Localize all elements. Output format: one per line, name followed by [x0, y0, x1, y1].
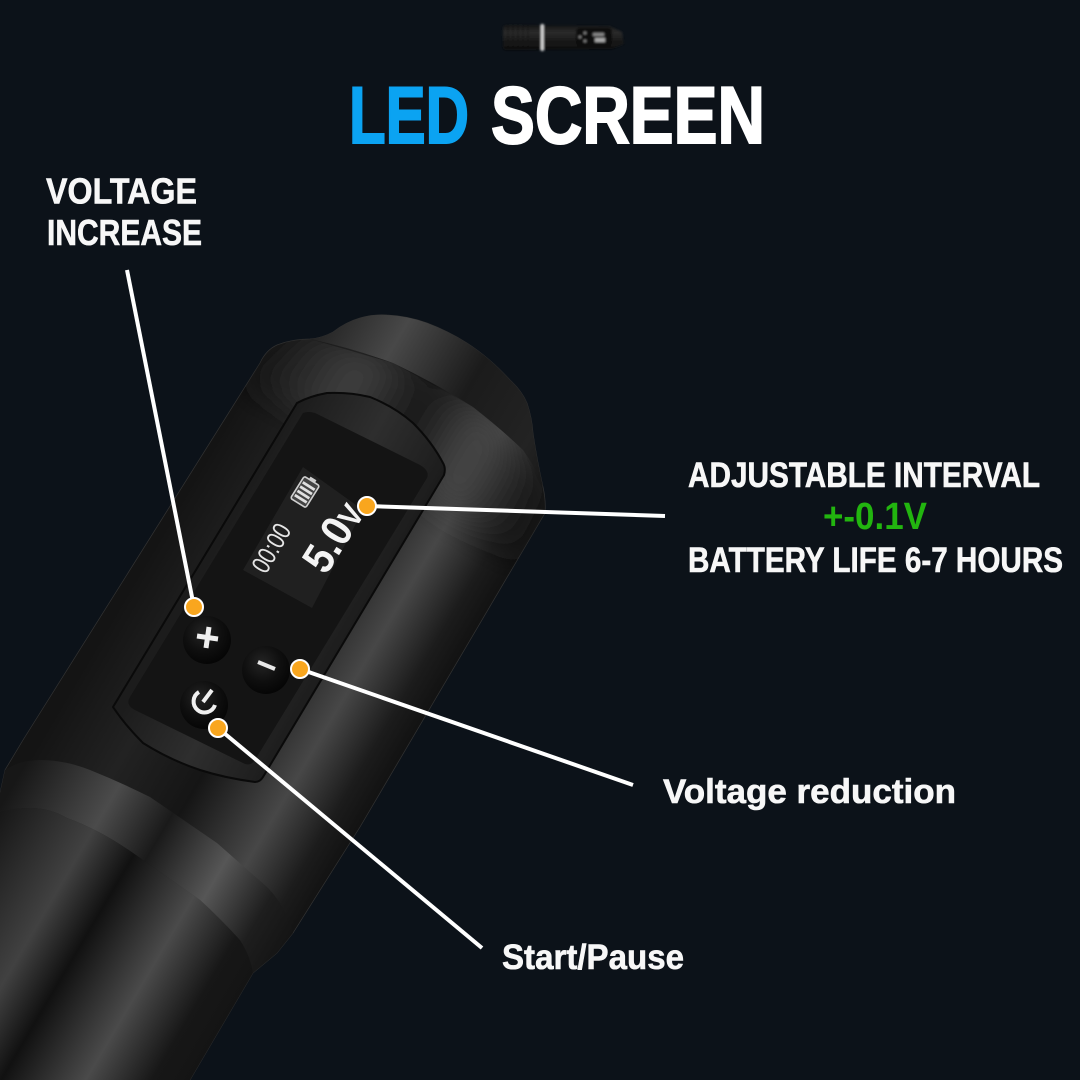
callout line: start pause — [218, 728, 482, 948]
button: plus — [183, 616, 231, 664]
icon: small pen thumbnail — [503, 24, 624, 51]
marker: start pause — [209, 719, 227, 737]
voltage reading: 5.0V — [293, 492, 374, 581]
battery icon — [290, 474, 321, 508]
label: adjustable interval and battery life: +-0.1V — [823, 496, 928, 538]
marker: display — [358, 497, 376, 515]
panel inner face — [128, 412, 428, 764]
title — [349, 71, 765, 161]
control panel bezel — [113, 393, 445, 782]
pen ring band — [0, 760, 293, 973]
title: LED — [349, 71, 469, 161]
pen main barrel — [0, 315, 545, 1080]
marker: voltage increase — [185, 598, 203, 616]
pen shoulder highlight — [244, 340, 536, 560]
callout line: voltage reduction — [300, 669, 633, 785]
label: voltage increase: INCREASE — [47, 212, 202, 253]
label: voltage increase — [46, 170, 202, 253]
timer text: 00:00 — [245, 518, 297, 578]
marker: voltage reduction — [291, 660, 309, 678]
callout line: display — [367, 506, 665, 516]
label: start pause: Start/Pause — [502, 938, 684, 977]
button: minus — [242, 646, 290, 694]
label: voltage reduction: Voltage reduction — [663, 773, 956, 811]
label: adjustable interval and battery life — [688, 456, 1063, 580]
label: voltage increase: VOLTAGE — [46, 170, 197, 212]
pen lower barrel — [0, 808, 253, 1080]
title: SCREEN — [491, 71, 765, 161]
callout line: voltage increase — [127, 270, 194, 607]
button: power — [180, 681, 228, 729]
display screen — [243, 467, 374, 608]
pen body — [0, 315, 550, 1080]
pen cap band — [310, 315, 543, 487]
